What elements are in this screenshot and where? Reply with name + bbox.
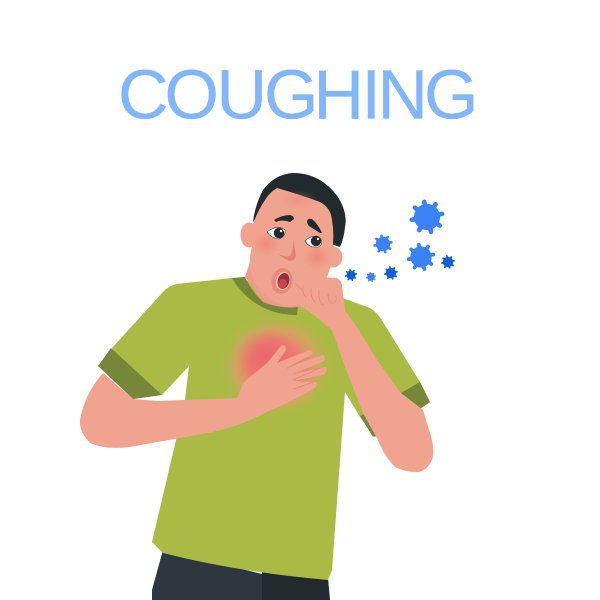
finger lines — [287, 358, 320, 389]
left arm and hand — [80, 345, 327, 448]
virus large — [412, 202, 442, 232]
nose — [277, 238, 296, 261]
lower cuff piece — [360, 414, 376, 437]
title: COUGHING — [118, 56, 478, 134]
trousers — [152, 550, 330, 600]
face — [250, 188, 333, 306]
left eye — [267, 227, 285, 239]
right sleeve cuff — [401, 382, 430, 411]
t-shirt — [112, 278, 348, 580]
virus small left — [346, 270, 356, 280]
cheeks and forehead flush — [252, 190, 331, 270]
person illustration — [80, 173, 433, 600]
right eye — [305, 236, 322, 247]
virus small light — [367, 273, 375, 281]
neck — [245, 262, 330, 308]
virus large lower — [409, 245, 433, 269]
virus small right — [442, 256, 454, 268]
chest pain glow — [218, 313, 334, 419]
right ear — [324, 246, 342, 268]
right sleeve back — [340, 297, 430, 437]
fist — [290, 277, 352, 336]
collar — [232, 277, 298, 315]
hair — [253, 173, 346, 247]
left sleeve cuff — [98, 348, 162, 399]
left ear — [240, 222, 258, 248]
eyebrows — [274, 215, 322, 233]
virus particles — [346, 202, 454, 281]
right arm — [325, 313, 433, 472]
mouth — [269, 266, 295, 296]
virus small dark — [385, 267, 397, 279]
virus medium — [375, 236, 391, 252]
